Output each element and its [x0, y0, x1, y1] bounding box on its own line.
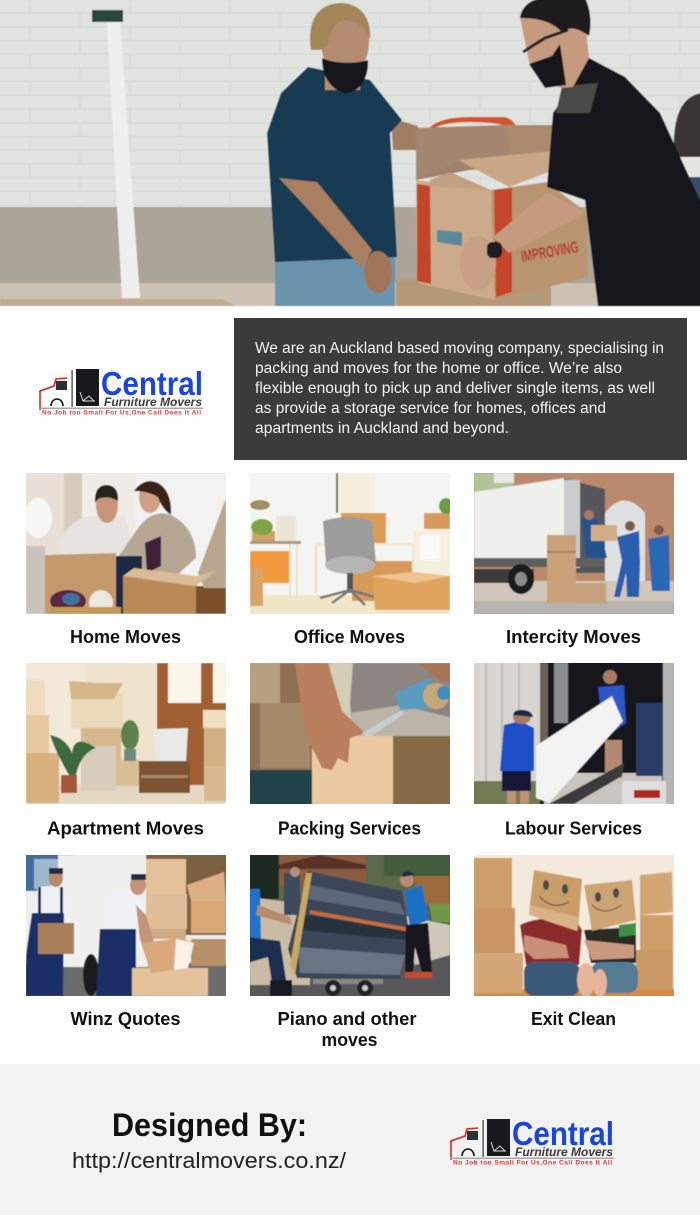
photo: wrapped piano on a dolly — [250, 855, 450, 996]
service: winz quotes — [23, 852, 229, 1029]
photo: couple with smiley boxes on their heads — [474, 855, 674, 996]
service: office moves — [247, 470, 453, 647]
footer logo: Furniture Movers — [515, 1145, 613, 1159]
label: Labour Services — [505, 818, 642, 838]
box print: IMPROVING — [520, 239, 580, 266]
logo: Central Furniture Movers — [39, 365, 203, 416]
footer panel — [0, 1064, 700, 1215]
hero photo: two movers lifting a cardboard box — [0, 0, 700, 306]
service: apartment moves — [23, 660, 229, 838]
label: moves — [322, 1030, 378, 1050]
intro paragraph: flexible enough to pick up and deliver single items, as well — [255, 380, 655, 397]
service: piano and other moves — [247, 852, 453, 1050]
panel: company introduction — [234, 318, 687, 460]
service: home moves — [23, 470, 229, 647]
photo: wrapped office chair and boxes — [250, 473, 450, 614]
intro paragraph: packing and moves for the home or office. We’re also — [255, 360, 622, 377]
footer logo — [450, 1115, 614, 1166]
label: Office Moves — [294, 627, 405, 647]
logo: Central Furniture Movers: Central — [101, 365, 203, 402]
service: packing services — [247, 660, 453, 838]
intro paragraph: as provide a storage service for homes, offices and — [255, 400, 606, 417]
service: labour services — [471, 660, 677, 838]
label: Intercity Moves — [506, 627, 641, 647]
photo: two movers in overalls with boxes — [26, 855, 226, 996]
label: Exit Clean — [531, 1009, 616, 1029]
footer logo: No Job too Small For Us,One Call Does It All — [453, 1160, 612, 1166]
service: intercity moves — [471, 470, 677, 647]
label: Winz Quotes — [70, 1009, 180, 1029]
label: Piano and other — [277, 1009, 416, 1029]
photo: truck loading with movers — [474, 473, 674, 614]
photo: couple packing boxes — [26, 473, 226, 614]
label: Home Moves — [70, 627, 181, 647]
service: exit clean — [471, 852, 677, 1029]
intro paragraph: We are an Auckland based moving company, specialising in — [255, 340, 664, 357]
photo: sealing a box with tape — [250, 663, 450, 804]
label: Apartment Moves — [47, 818, 204, 838]
website url: http://centralmovers.co.nz/ — [72, 1148, 347, 1173]
logo: Central Furniture Movers: No Job too Small For Us,One Call Does It All — [42, 410, 201, 416]
photo: movers unloading a white panel — [474, 663, 674, 804]
label: Packing Services — [278, 818, 421, 838]
footer logo: Central — [512, 1115, 614, 1152]
photo: boxes and plants in an apartment — [26, 663, 226, 804]
intro paragraph: apartments in Auckland and beyond. — [255, 420, 509, 437]
footer heading: Designed By: — [112, 1107, 307, 1143]
logo: Central Furniture Movers: Furniture Movers — [104, 395, 202, 409]
